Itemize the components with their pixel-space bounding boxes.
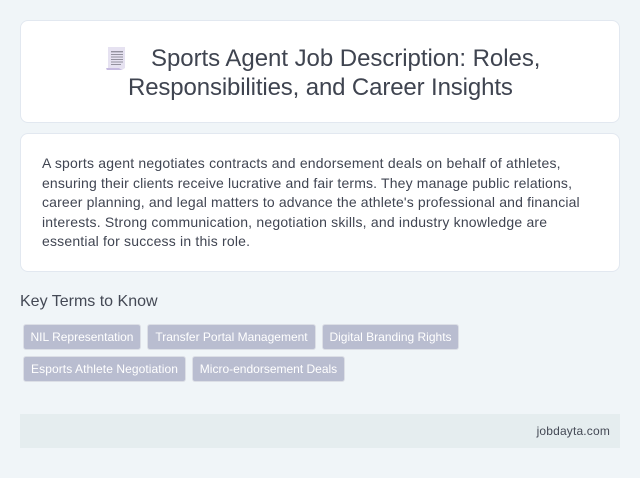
- tag: Micro-endorsement Deals: [192, 356, 345, 382]
- footer site name: jobdayta.com: [537, 424, 610, 438]
- description text: career planning, and legal matters to advance the athlete's professional and financial: [42, 194, 580, 210]
- tag: Transfer Portal Management: [147, 324, 316, 350]
- tag: Esports Athlete Negotiation: [23, 356, 186, 382]
- tag: NIL Representation: [23, 324, 141, 350]
- description text: [42, 155, 580, 249]
- description text: A sports agent negotiates contracts and endorsement deals on behalf of athletes,: [42, 155, 561, 171]
- description text: essential for success in this role.: [42, 233, 250, 249]
- title: Responsibilities, and Career Insights: [128, 74, 513, 101]
- panel: description card: [20, 133, 620, 272]
- panel: title card: [20, 20, 620, 123]
- title: [128, 45, 540, 101]
- title: Sports Agent Job Description: Roles,: [151, 45, 540, 72]
- tag: Digital Branding Rights: [322, 324, 459, 350]
- icon: document scroll: [106, 47, 125, 70]
- tag: Digital Branding Rights: Digital Branding Rights: [329, 330, 452, 344]
- description text: interests. Strong communication, negotiation skills, and industry knowledge are: [42, 214, 547, 230]
- tag: NIL Representation: NIL Representation: [31, 330, 133, 344]
- tag: Transfer Portal Management: Transfer Portal Management: [155, 330, 308, 344]
- tag: Esports Athlete Negotiation: Esports Athlete Negotiation: [31, 362, 178, 376]
- footer bar: [20, 414, 620, 448]
- tag: Micro-endorsement Deals: Micro-endorsement Deals: [200, 362, 337, 376]
- description text: ensuring their clients receive lucrative and fair terms. They manage public relations,: [42, 175, 572, 191]
- heading: key terms: Key Terms to Know: [20, 293, 158, 310]
- panel: key term tags: [23, 324, 459, 382]
